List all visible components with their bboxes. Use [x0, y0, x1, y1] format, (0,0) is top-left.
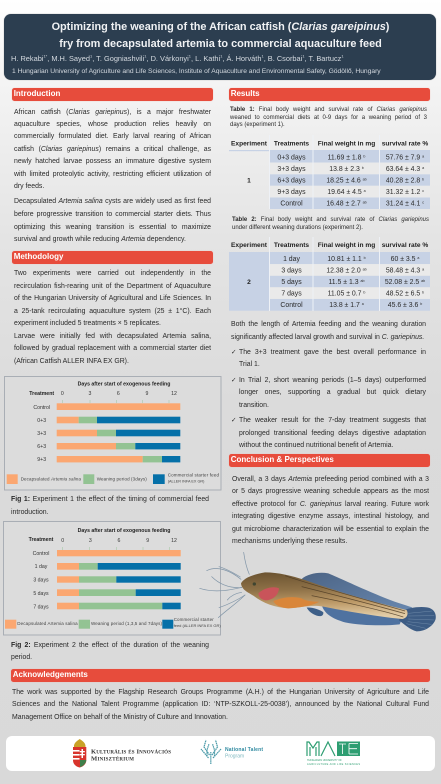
table 2: 52.08 ± 2.5: [385, 279, 419, 286]
figure 1: feeding schedule chart: 9: [146, 391, 149, 397]
methodology text: [14, 270, 211, 364]
introduction text: African catfish (Clarias gariepinus), is a major freshwater: [14, 109, 211, 116]
table 1: ab: [363, 177, 367, 181]
table 2: 13.8 ± 1.7: [329, 302, 360, 309]
authors: H. Rekabi1*, M.H. Sayed1, T. Gogniashvili1, D. Várkonyi1, L. Kathi1, Á. Horváth1, B. Csorbai1, T. Bartucz1: [11, 54, 344, 63]
table 2: 45.6 ± 3.6: [388, 302, 418, 309]
logo: MATE university: HUNGARIAN UNIVERSITY OF: [307, 759, 342, 762]
methodology text: (African Catfish ALLER INFA EX GR).: [14, 358, 129, 364]
bullet list of key results: The weaker result for the 7-day treatment suggests that: [239, 417, 426, 424]
figure 2: weaning duration chart: 9: [146, 538, 149, 544]
conclusion text: mechanisms underlying these results.: [232, 538, 347, 545]
table 1: 16.48 ± 2.7: [326, 201, 361, 208]
figure 2: weaning duration chart: [3, 521, 221, 636]
table 1: 9+3 days: [277, 189, 306, 196]
table 1: b: [362, 166, 364, 170]
title banner: [4, 14, 436, 80]
acknowledgements text: [12, 688, 429, 721]
table 1: a: [364, 189, 366, 193]
table 1: 31.24 ± 4.1: [386, 201, 420, 208]
table 2: [229, 237, 430, 311]
table 1: Final weight in mg: [318, 140, 375, 147]
table 1: 11.69 ± 1.8: [328, 154, 362, 161]
figure 1: feeding schedule chart: [4, 376, 222, 490]
table 1: a: [422, 154, 424, 158]
table 2: a: [362, 302, 364, 306]
table 1 caption: days (experiment 1).: [230, 122, 285, 128]
figure 2: weaning duration chart: Control: [33, 551, 49, 557]
bullet list of key results: ✓: [231, 349, 236, 356]
table 1: 63.64 ± 4.3: [386, 166, 420, 173]
table 1: 19.64 ± 4.5: [327, 189, 362, 196]
bullet list of key results: transition.: [239, 402, 269, 409]
figure 1 caption: introduction.: [11, 509, 49, 516]
logo: National Talent Program: Program: [225, 754, 244, 760]
conclusion text: Overall, a 3 days Artemia prefeeding period combined with a 3: [232, 476, 429, 483]
table 1: a: [422, 166, 424, 170]
table 2: ab: [363, 267, 367, 271]
bullet list of key results: Trial 1.: [239, 361, 260, 368]
methodology text: recirculation fish-rearing unit of the Department of Aquaculture: [14, 283, 211, 290]
figure 2: weaning duration chart: 3 days: [33, 578, 49, 584]
logo: Ministry of Culture and Innovation: Minisztérium: [91, 756, 134, 762]
logo strip: [6, 736, 435, 770]
section heading: conclusion: Conclusion & Perspectives: [231, 455, 334, 464]
table 2: 10.81 ± 1.1: [327, 256, 362, 263]
introduction text: optimizing this weaning transition is essential to maximize: [14, 224, 211, 230]
table 1: 31.32 ± 1.2: [386, 189, 420, 196]
figure 2: weaning duration chart: 5 days: [33, 591, 49, 597]
introduction text: [14, 108, 211, 243]
bullet list of key results: [231, 348, 426, 449]
logo: Ministry of Culture and Innovation: [73, 739, 171, 768]
table 2: 5 days: [281, 279, 302, 286]
table 2: Control: [280, 302, 303, 309]
methodology text: of the Hungarian University of Agricultural and Life Sciences. In: [14, 295, 211, 302]
table 1: 13.8 ± 2.3: [329, 166, 360, 173]
section heading: methodology: Methodology: [14, 252, 63, 261]
table 2: b: [363, 291, 365, 295]
conclusion text: integrating digestive enzyme assays, intestinal histology, and: [232, 513, 429, 520]
table 2 caption: [232, 216, 429, 231]
methodology text: experiment included 5 treatments × 5 replicates.: [14, 320, 161, 327]
conclusion text: [232, 476, 429, 545]
section heading: acknowledgements: Acknowledgements: [13, 670, 88, 679]
table 2: ab: [361, 279, 365, 283]
logo: MATE university: AGRICULTURE AND LIFE SCIENCES: [307, 763, 360, 766]
table 2: b: [364, 256, 366, 260]
table 1 caption: weaned to commercial diets at 0-9 days for a weaning period of 3: [230, 115, 427, 121]
figure 2: weaning duration chart: 6: [118, 538, 121, 544]
introduction text: newly hatched larvae possess an immature digestive system: [14, 158, 211, 165]
table 2: 58.48 ± 4.3: [386, 267, 420, 274]
methodology text: a 25-tank recirculating aquaculture system (25 ± 1°C). Each: [14, 308, 211, 315]
table 1: b: [422, 177, 424, 181]
table 2 caption: under different weaning durations (experiment 2).: [232, 225, 363, 231]
table 1: c: [422, 201, 424, 205]
table 1: b: [363, 154, 365, 158]
figure 2: weaning duration chart: Days after start of exogenous feeding: [78, 528, 170, 534]
figure 2: weaning duration chart: Treatment: [29, 537, 54, 543]
table 2: 60 ± 3.5: [391, 256, 415, 263]
table 2: 11.5 ± 1.3: [328, 279, 359, 286]
figure 1: feeding schedule chart: Commercial starter feed: [168, 472, 219, 477]
table 2: 7 days: [281, 291, 302, 298]
figure 1: feeding schedule chart: 0: [61, 391, 64, 397]
table 1: survival rate %: [382, 140, 428, 147]
introduction text: dry feeds.: [14, 183, 44, 190]
conclusion text: gut microbiome characterization will be essential to explain the: [232, 526, 429, 533]
logo: Ministry of Culture and Innovation: Kulturális és Innovációs: [91, 748, 171, 756]
introduction text: aquaculture species, whose production relies heavily on: [14, 121, 211, 128]
table 2: b: [422, 291, 424, 295]
affiliation: 1 Hungarian University of Agriculture and Life Sciences, Institute of Aquaculture and Environmental Safety, Gödöllő, Hungary: [12, 68, 381, 75]
figure 2: weaning duration chart: Weaning period (1,3,5 and 7days): [91, 621, 162, 626]
title: fry from decapsulated artemia to commercial aquaculture feed: [59, 38, 382, 50]
table 2: ab: [421, 279, 425, 283]
methodology text: Larvae were initially fed with decapsulated Artemia salina,: [14, 333, 211, 340]
figure 2: weaning duration chart: Commercial starter: [174, 617, 214, 622]
table 2 caption: Table 2: Final body weight and survival rate of Clarias gariepinus: [232, 217, 429, 223]
figure 2 caption: Fig 2: Experiment 2 the effect of the duration of the weaning: [11, 642, 209, 649]
acknowledgements text: Management Office on behalf of the Ministry of Culture and Innovation.: [12, 714, 228, 721]
results discussion text: significantly affected larval growth and survival in C. gariepinus.: [231, 334, 424, 341]
table 1: Experiment: [231, 140, 268, 147]
table 1: Treatments: [274, 140, 309, 147]
bullet list of key results: ✓: [231, 417, 236, 424]
figure 2: weaning duration chart: feed (ALLER INFA EX GR): [174, 623, 221, 628]
introduction text: catfish (Clarias gariepinus) remains a critical challenge, as: [14, 146, 211, 153]
table 1: Control: [280, 201, 303, 208]
figure 1: feeding schedule chart: Control: [33, 405, 50, 411]
table 2: survival rate %: [382, 242, 428, 249]
figure 2: weaning duration chart: Decapsulated Artemia salina: [17, 621, 78, 626]
figure 1: feeding schedule chart: 3: [89, 391, 92, 397]
bullet list of key results: without the continued nutritional benefit of Artemia.: [239, 442, 393, 449]
table 1: 40.28 ± 2.8: [386, 177, 420, 184]
bullet list of key results: longer ones, supporting a gradual but quick dietary: [239, 389, 426, 396]
table 1: [229, 140, 430, 209]
figure 2: weaning duration chart: 7 days: [33, 604, 49, 610]
table 2: Treatments: [274, 242, 309, 249]
figure 1: feeding schedule chart: Days after start of exogenous feeding: [78, 382, 170, 388]
figure 1: feeding schedule chart: 3+3: [37, 431, 46, 437]
logo: National Talent Program: [200, 740, 263, 764]
table 1: 1: [247, 177, 251, 184]
bullet list of key results: The 3+3 treatment gave the best overall performance in: [239, 349, 426, 356]
table 1: ab: [363, 201, 367, 205]
table 1: 3+3 days: [277, 166, 306, 173]
section heading: acknowledgements: [11, 669, 430, 682]
figure 1: feeding schedule chart: Weaning period (3days): [97, 476, 147, 482]
table 2: 11.05 ± 0.7: [328, 291, 362, 298]
table 1 caption: [230, 106, 427, 128]
figure 1: feeding schedule chart: 12: [171, 391, 177, 397]
figure 1: feeding schedule chart: Decapsulated Artemia salina: [21, 476, 81, 482]
figure 1 caption: [11, 496, 209, 516]
table 2: b: [420, 302, 422, 306]
table 1 caption: Table 1: Final body weight and survival rate of Clarias gariepinus: [230, 107, 427, 113]
methodology text: followed by gradual replacement with a commercial starter diet: [14, 345, 211, 352]
table 1: 6+3 days: [277, 177, 306, 184]
figure 1: feeding schedule chart: 0+3: [37, 418, 46, 424]
table 2: 48.52 ± 6.5: [386, 291, 420, 298]
figure 2: weaning duration chart: 3: [89, 538, 92, 544]
figure 2 caption: [11, 642, 209, 661]
results discussion text: [231, 320, 426, 341]
figure 2: weaning duration chart: 0: [61, 538, 64, 544]
section heading: introduction: [12, 88, 213, 100]
methodology text: Two experiments were carried out independently in the: [14, 270, 211, 277]
introduction text: survival and growth while reducing Artemia dependency.: [14, 236, 186, 243]
table 1: 0+3 days: [277, 154, 306, 161]
introduction text: Decapsulated Artemia salina cysts are widely used as first feed: [14, 198, 211, 205]
introduction text: before progressive transition to commercial starter diets. Thus: [14, 211, 211, 218]
table 2: Final weight in mg: [318, 242, 375, 249]
table 1: c: [422, 189, 424, 193]
title: [52, 20, 389, 50]
table 2: a: [422, 267, 424, 271]
figure 2: weaning duration chart: 12: [171, 538, 177, 544]
figure 1: feeding schedule chart: 6: [117, 391, 120, 397]
table 2: 12.38 ± 2.0: [326, 267, 361, 274]
conclusion text: effective protocol for C. gariepinus larval rearing. Future work: [232, 501, 429, 508]
results discussion text: Both the length of Artemia feeding and the weaning duration: [231, 321, 426, 328]
table 2: Experiment: [231, 242, 268, 249]
figure 2 caption: period.: [11, 654, 32, 661]
section heading: results: Results: [231, 89, 260, 98]
acknowledgements text: Sciences and the National Talent Programme (application ID: ‘NTP-SZKOLL-25-0038’), announced by the National Cultural Fund: [12, 701, 429, 708]
title: Optimizing the weaning of the African catfish (Clarias gareipinus): [52, 20, 389, 32]
introduction text: commercially formulated diet. Early larval rearing of African: [14, 133, 211, 140]
figure 2: weaning duration chart: 1 day: [35, 564, 48, 570]
figure 1: feeding schedule chart: Treatment: [29, 391, 54, 397]
figure 1: feeding schedule chart: 6+3: [37, 444, 46, 450]
introduction text: with limited proteolytic activity, restricting efficient utilization of: [14, 171, 211, 178]
section heading: introduction: Introduction: [14, 89, 60, 98]
section heading: results: [229, 88, 430, 100]
figure 1: feeding schedule chart: (ALLER INFA EX GR): [168, 480, 205, 484]
conclusion text: or 5 days progressive weaning schedule appears as the most: [232, 488, 429, 495]
table 2: 3 days: [281, 267, 302, 274]
acknowledgements text: The work was supported by the Flagship Research Groups Programme (Á.H.) of the Hungarian University of Agriculture and Life: [12, 689, 429, 696]
section heading: methodology: [12, 251, 213, 264]
catfish illustration: [199, 552, 436, 632]
section heading: conclusion: [229, 454, 430, 467]
table 2: 1 day: [283, 256, 300, 263]
bullet list of key results: In Trial 2, short weaning periods (1–5 days) outperformed: [239, 377, 426, 384]
table 1: 57.76 ± 7.9: [386, 154, 420, 161]
table 2: 2: [247, 279, 251, 286]
bullet list of key results: prolonged transitional feeding delays digestive adaptation: [239, 430, 426, 437]
logo: MATE university: [306, 740, 360, 766]
table 1: 18.25 ± 4.6: [326, 177, 361, 184]
figure 1 caption: Fig 1: Experiment 1 the effect of the timing of commercial feed: [11, 496, 209, 503]
figure 1: feeding schedule chart: 9+3: [37, 457, 46, 463]
logo: National Talent Program: National Talent: [225, 747, 263, 753]
bullet list of key results: ✓: [231, 377, 236, 384]
table 2: a: [417, 256, 419, 260]
